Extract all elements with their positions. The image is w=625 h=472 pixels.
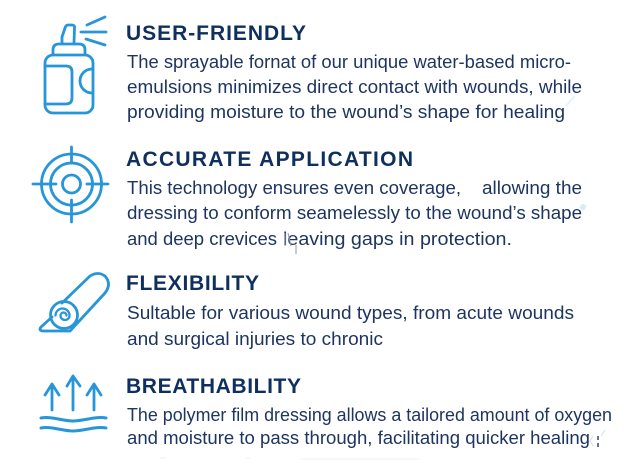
heading: accurate application: ACCURATE APPLICATION <box>126 148 413 171</box>
icon: spray bottle <box>45 17 106 113</box>
text block: breathability description <box>127 405 612 448</box>
text block: flexibility description <box>127 303 574 349</box>
text block: breathability description: and moisture to pass through, facilitating quicker healing <box>127 428 590 448</box>
text block: user-friendly description <box>127 52 582 122</box>
text block: flexibility description: and surgical injuries to chronic <box>127 329 383 349</box>
text block: accurate application description <box>127 178 582 249</box>
icon: arrows over waves <box>41 376 106 431</box>
text block: user-friendly description: emulsions minimizes direct contact with wounds, while <box>127 77 582 97</box>
text block: accurate application description: allowing the <box>482 178 582 198</box>
text block: breathability description: The polymer film dressing allows a tailored amount of oxygen <box>127 405 612 425</box>
panel: flexibility <box>40 272 574 349</box>
heading: flexibility: FLEXIBILITY <box>126 272 259 295</box>
panel: user-friendly <box>45 17 582 122</box>
heading: breathability: BREATHABILITY <box>126 375 301 398</box>
text block: accurate application description: leaving gaps in protection. <box>283 229 512 249</box>
icon: target <box>33 147 108 222</box>
text block: flexibility description: Sultable for various wound types, from acute wounds <box>127 303 574 323</box>
heading: user-friendly: USER-FRIENDLY <box>126 22 306 45</box>
icon: rolled film <box>40 274 108 331</box>
text block: user-friendly description: providing moisture to the wound’s shape for healing <box>127 102 565 122</box>
text block: accurate application description: dressing to conform seamelessly to the wound’s shape <box>127 203 582 223</box>
text block: accurate application description: This technology ensures even coverage, <box>127 178 461 198</box>
panel: breathability <box>41 375 612 448</box>
text block: user-friendly description: The sprayable fornat of our unique water-based micro- <box>127 52 571 72</box>
text block: accurate application description: and deep crevices <box>127 229 277 249</box>
panel: accurate application <box>33 147 582 249</box>
